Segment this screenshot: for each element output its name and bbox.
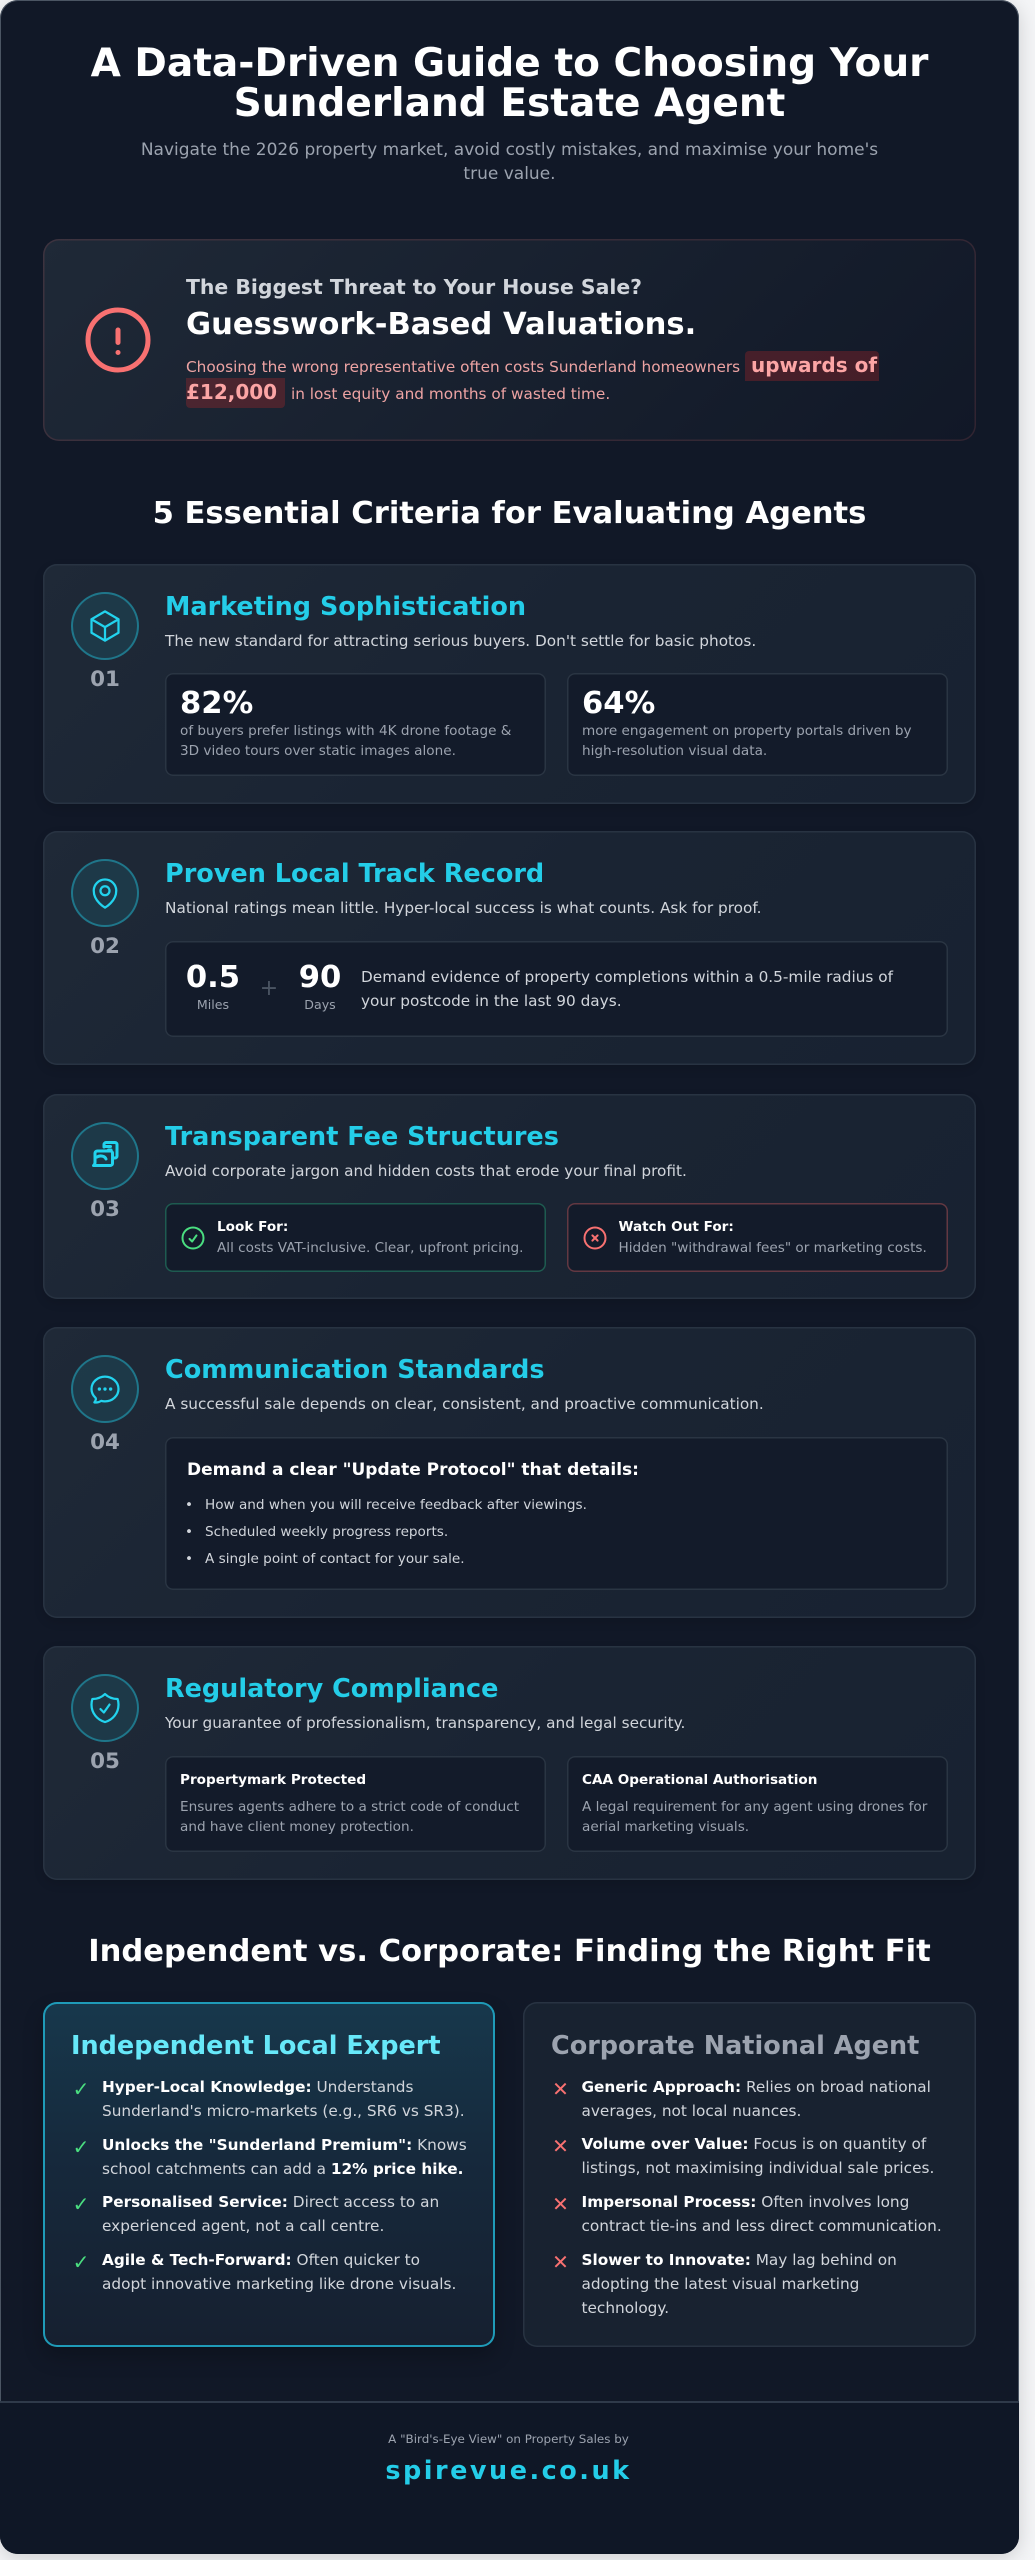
card text: aerial marketing visuals. (582, 1819, 749, 1835)
watch out heading: Watch Out For: (618, 1218, 734, 1234)
proof description: your postcode in the last 90 days. (361, 992, 622, 1010)
item text: Impersonal Process: Often involves long (582, 2193, 909, 2211)
icon: check circle (182, 1226, 204, 1250)
panel: biggest threat (43, 239, 976, 441)
item: hyper-local (73, 2077, 465, 2120)
icon: location pin (71, 859, 139, 927)
number 01: 01 (90, 666, 120, 692)
item text: adopt innovative marketing like drone visuals. (102, 2275, 456, 2293)
stat caption: of buyers prefer listings with 4K drone footage & (180, 723, 511, 739)
stat caption: 3D video tours over static images alone. (180, 743, 456, 759)
item text: averages, not local nuances. (582, 2102, 801, 2120)
look for text: All costs VAT-inclusive. Clear, upfront pricing. (217, 1240, 524, 1256)
icon: warning circle (86, 308, 150, 372)
criterion title: Regulatory Compliance (165, 1674, 498, 1704)
item text: contract tie-ins and less direct communication. (582, 2217, 942, 2235)
criterion description: Your guarantee of professionalism, transparency, and legal security. (165, 1714, 685, 1732)
item: generic (552, 2076, 931, 2120)
item text: Personalised Service: Direct access to an (102, 2193, 439, 2211)
criterion title: Communication Standards (165, 1355, 545, 1385)
watch out card (567, 1202, 948, 1272)
item text: experienced agent, not a call centre. (102, 2217, 384, 2235)
item text: Volume over Value: Focus is on quantity of (582, 2135, 926, 2153)
stat value: 82% (180, 686, 253, 721)
stat caption: high-resolution visual data. (582, 743, 767, 759)
stat card 64% (567, 673, 948, 776)
footer brand: spirevue.co.uk (385, 2456, 632, 2486)
title: Sunderland Estate Agent (234, 81, 785, 126)
card heading: Propertymark Protected (180, 1772, 366, 1788)
panel: criterion 01 (43, 564, 976, 804)
column title: Corporate National Agent (551, 2031, 919, 2061)
CAA card (567, 1756, 948, 1852)
item text: school catchments can add a 12% price hike. (102, 2160, 463, 2178)
item text: listings, not maximising individual sale prices. (582, 2159, 934, 2177)
card heading: CAA Operational Authorisation (582, 1772, 817, 1788)
number 02: 02 (90, 934, 120, 959)
item text: Generic Approach: Relies on broad national (582, 2078, 931, 2096)
subtitle: Navigate the 2026 property market, avoid costly mistakes, and maximise your home's (141, 140, 878, 160)
miles stat: Miles (197, 997, 229, 1012)
item text: adopting the latest visual marketing (582, 2275, 859, 2293)
item text (582, 2078, 931, 2120)
item text: Hyper-Local Knowledge: Understands (102, 2078, 414, 2096)
item text: Unlocks the "Sunderland Premium": Knows (102, 2136, 467, 2154)
protocol list: • (185, 1524, 193, 1540)
footer (0, 2401, 1019, 2554)
watch out text: Hidden "withdrawal fees" or marketing costs. (618, 1240, 927, 1256)
number 03: 03 (90, 1196, 120, 1222)
stat caption: more engagement on property portals driven by (582, 723, 912, 739)
proof radius card (165, 941, 948, 1037)
icon: chat bubble (71, 1355, 139, 1423)
criterion description: The new standard for attracting serious buyers. Don't settle for basic photos. (165, 632, 756, 650)
panel: criterion 02 (43, 831, 976, 1065)
propertymark card (165, 1756, 546, 1852)
subtitle (141, 140, 878, 184)
item text (102, 2078, 465, 2120)
check mark: ✓ (73, 2135, 89, 2159)
stat card 82% (165, 673, 546, 776)
cross mark: ✕ (552, 2192, 569, 2216)
subtitle: true value. (463, 164, 556, 184)
number 05: 05 (90, 1749, 120, 1774)
card text (582, 1799, 928, 1835)
panel: corporate national agent (523, 2002, 976, 2347)
days stat: Days (304, 997, 336, 1012)
days stat: 90 (299, 960, 341, 995)
icon: fee documents (71, 1122, 139, 1190)
item text (582, 2135, 934, 2177)
item text: Slower to Innovate: May lag behind on (582, 2251, 897, 2269)
threat headline: Guesswork-Based Valuations. (186, 307, 696, 342)
check mark: ✓ (73, 2192, 89, 2216)
icon: cube (71, 592, 139, 660)
criterion description: National ratings mean little. Hyper-local success is what counts. Ask for proof. (165, 899, 762, 917)
item: service (73, 2192, 439, 2235)
panel: criterion 03 (43, 1094, 976, 1299)
item text: Agile & Tech-Forward: Often quicker to (102, 2251, 420, 2269)
item: volume (552, 2134, 934, 2177)
check mark: ✓ (73, 2077, 89, 2101)
criterion title: Transparent Fee Structures (165, 1122, 559, 1152)
card text: Ensures agents adhere to a strict code of conduct (180, 1799, 519, 1815)
title: A Data-Driven Guide to Choosing Your (91, 41, 928, 86)
stat value: 64% (582, 686, 655, 721)
icon: cross circle (584, 1226, 606, 1250)
item text (102, 2251, 456, 2293)
panel: independent local expert (43, 2002, 495, 2347)
plus sign: + (260, 976, 278, 1001)
item text: Sunderland's micro-markets (e.g., SR6 vs SR3). (102, 2102, 465, 2120)
look for heading: Look For: (217, 1218, 288, 1234)
miles stat (186, 960, 240, 1012)
threat description: in lost equity and months of wasted time. (291, 385, 610, 403)
threat description: Choosing the wrong representative often costs Sunderland homeowners (186, 358, 740, 376)
card text: A legal requirement for any agent using drones for (582, 1799, 927, 1815)
cross mark: ✕ (552, 2076, 569, 2100)
protocol list: How and when you will receive feedback after viewings. (205, 1496, 587, 1512)
item text (582, 2251, 897, 2317)
footer tagline: A "Bird's-Eye View" on Property Sales by (388, 2432, 629, 2446)
proof description: Demand evidence of property completions within a 0.5-mile radius of (361, 968, 893, 986)
item: premium (73, 2135, 467, 2178)
threat description: £12,000 (186, 380, 277, 404)
item: agile (73, 2250, 456, 2293)
column title: Independent Local Expert (71, 2031, 441, 2061)
criterion title: Marketing Sophistication (165, 592, 526, 622)
icon: shield check (71, 1674, 139, 1742)
protocol list: • (185, 1550, 193, 1566)
panel: criterion 05 (43, 1646, 976, 1880)
item: slower (552, 2250, 897, 2317)
heading: comparison: Independent vs. Corporate: Finding the Right Fit (88, 1934, 931, 1969)
look for card (165, 1202, 546, 1272)
stat caption (582, 723, 912, 759)
panel: criterion 04 (43, 1327, 976, 1618)
protocol list: Scheduled weekly progress reports. (205, 1524, 448, 1540)
item text (102, 2193, 439, 2235)
protocol heading: Demand a clear "Update Protocol" that details: (187, 1460, 639, 1480)
item text (102, 2136, 467, 2178)
cross mark: ✕ (552, 2250, 569, 2274)
proof description (361, 968, 894, 1010)
check mark: ✓ (73, 2250, 89, 2274)
criterion description: Avoid corporate jargon and hidden costs that erode your final profit. (165, 1162, 687, 1180)
criterion title: Proven Local Track Record (165, 859, 544, 889)
protocol list (185, 1496, 587, 1566)
threat description: upwards of (751, 353, 877, 377)
number 04: 04 (90, 1430, 120, 1455)
protocol list: • (185, 1496, 193, 1512)
threat kicker: The Biggest Threat to Your House Sale? (186, 275, 642, 299)
stat caption (180, 723, 511, 759)
card text: and have client money protection. (180, 1819, 414, 1835)
protocol list: A single point of contact for your sale. (205, 1550, 465, 1566)
card text (180, 1799, 519, 1835)
days stat (299, 960, 341, 1012)
threat description (186, 351, 879, 408)
heading: criteria: 5 Essential Criteria for Evaluating Agents (153, 496, 866, 530)
item text (582, 2193, 942, 2235)
criterion description: A successful sale depends on clear, consistent, and proactive communication. (165, 1395, 764, 1413)
item: impersonal (552, 2192, 942, 2235)
miles stat: 0.5 (186, 960, 240, 995)
cross mark: ✕ (552, 2134, 569, 2158)
item text: technology. (582, 2299, 669, 2317)
update protocol card (165, 1436, 948, 1590)
title (90, 41, 928, 126)
